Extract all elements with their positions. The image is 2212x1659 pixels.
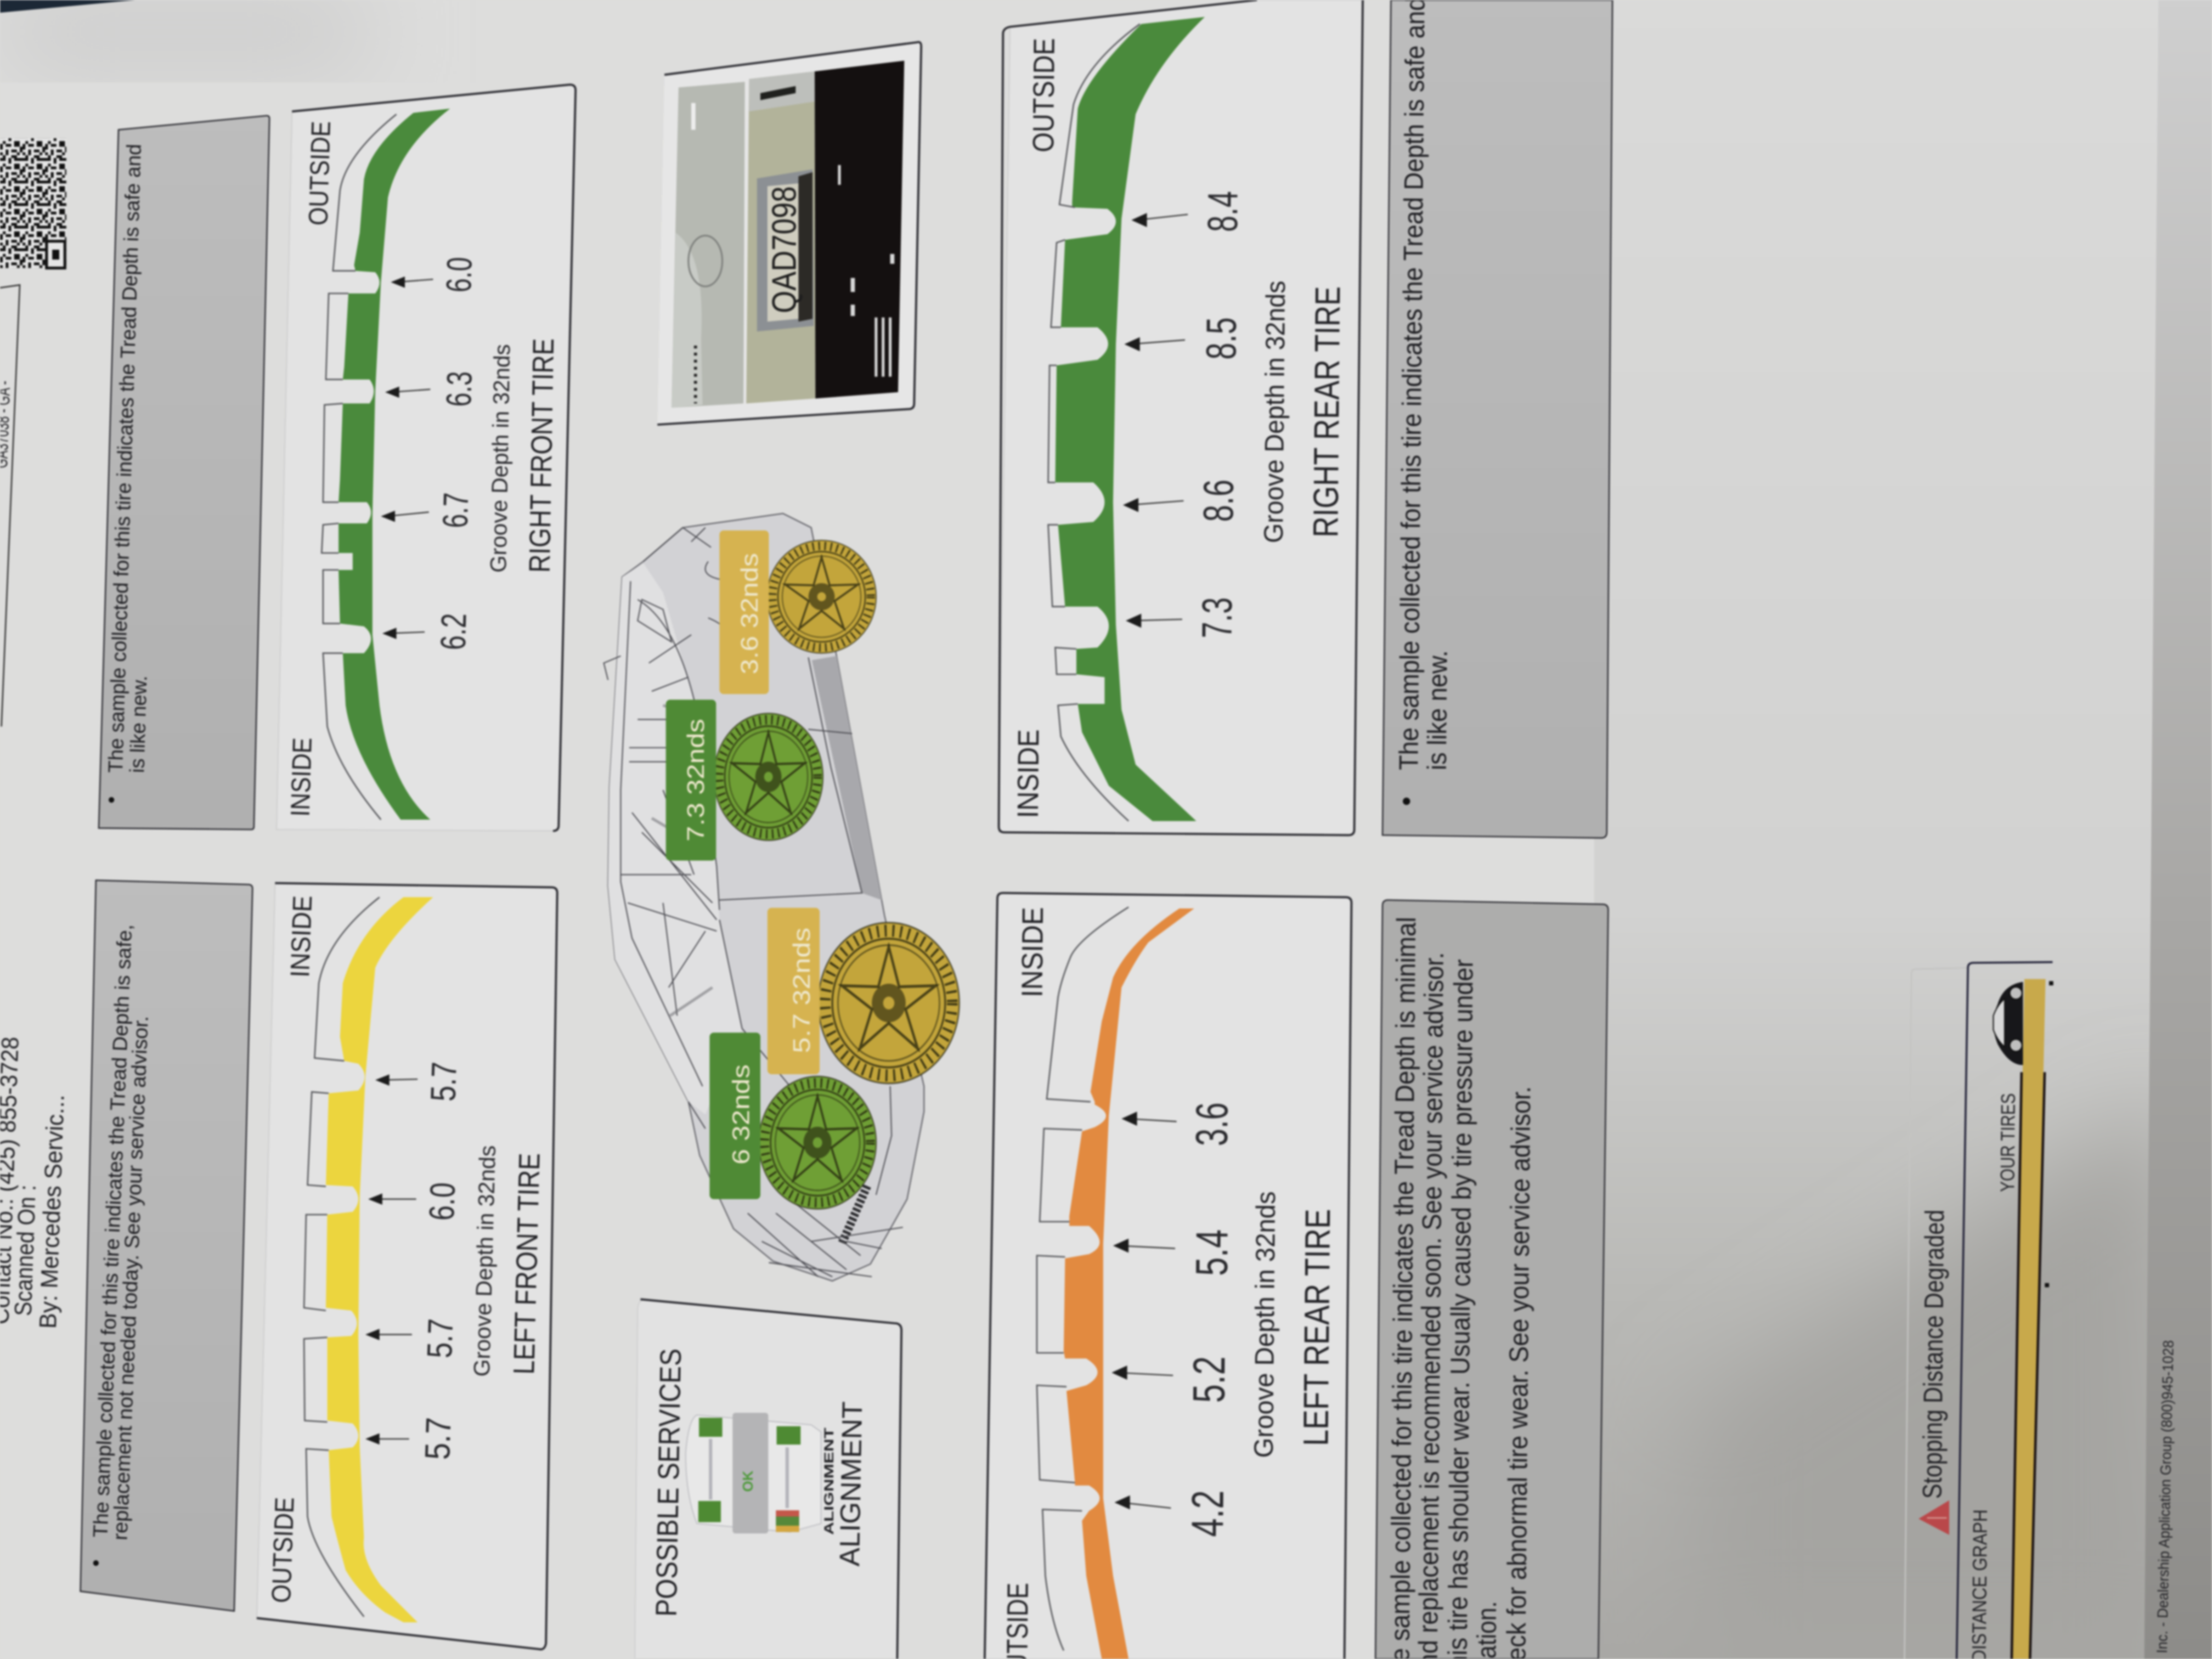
icon: QR code [0, 138, 66, 268]
badge: 5.7 32nds [768, 908, 820, 1074]
panel: possible services [635, 1299, 901, 1659]
groove arrows [1123, 213, 1188, 628]
illustration: car with tire readings [604, 514, 960, 1281]
panel: left front tire note [81, 881, 252, 1611]
groove depth values: 8.5 [1198, 317, 1245, 360]
heading: Stopping Distance Degraded [1918, 1210, 1950, 1499]
groove depth values: 5.7 [423, 1061, 464, 1102]
bar markers [2045, 981, 2053, 1287]
groove depth values: 6.7 [436, 492, 476, 528]
panel: license plate photo [657, 42, 921, 425]
panel: right front tire [276, 84, 575, 831]
groove depth values: 3.6 [1187, 1102, 1237, 1146]
panel: left rear tire note: and replacement is recommended soon. See your service advisor. [1413, 952, 1449, 1659]
tire labels: Groove Depth in 32nds [1249, 1191, 1281, 1458]
groove depth values: 7.3 [1194, 597, 1241, 639]
tire labels: Groove Depth in 32nds [469, 1145, 500, 1377]
tread profile: green [1055, 17, 1205, 821]
groove arrows [365, 1074, 417, 1444]
groove depth values: 5.4 [1187, 1229, 1238, 1276]
tire labels: Groove Depth in 32nds [486, 344, 515, 573]
badge: 3.6 32nds: 3.6 32nds [736, 553, 763, 674]
tire labels: RIGHT FRONT TIRE [523, 338, 560, 573]
tread profile: yellow [326, 897, 433, 1622]
label: alignment large: ALIGNMENT [833, 1401, 868, 1567]
gold stopping bar [2012, 979, 2046, 1659]
tire labels: LEFT FRONT TIRE [507, 1153, 546, 1375]
groove depth values: 5.7 [417, 1417, 459, 1460]
warning triangle icon [1918, 1500, 1949, 1535]
tread profile: orange [1064, 909, 1194, 1659]
wheel: left front [759, 1076, 876, 1209]
panel: right rear tire note [1383, 0, 1612, 838]
panel: right front tire note: The sample collected for this tire indicates the Tread Depth is safe and [104, 144, 145, 773]
groove depth values: 6.2 [433, 613, 474, 651]
groove depth values [1183, 1102, 1238, 1537]
tire labels: LEFT REAR TIRE [1296, 1209, 1338, 1446]
graph frame [1957, 962, 2052, 1659]
panel: left rear tire [985, 893, 1351, 1659]
label: alignment small: ALIGNMENT [822, 1427, 837, 1535]
tire labels: OUTSIDE [1027, 38, 1061, 153]
photo: dark background [815, 61, 904, 398]
groove depth values [417, 1061, 464, 1460]
groove depth values: 6.3 [439, 371, 479, 407]
panel: left front tire note: replacement not needed today. See your service advisor. [108, 1015, 153, 1541]
groove depth values: 5.2 [1184, 1356, 1234, 1403]
icon: car [1993, 982, 2023, 1065]
badge: 7.3 32nds: 7.3 32nds [682, 719, 709, 842]
header text block [0, 285, 70, 1329]
panel: left front tire note: The sample collected for this tire indicates the Tread Depth is safe, [88, 924, 136, 1538]
wheel: left rear [818, 923, 960, 1084]
panel: left front tire [257, 883, 557, 1649]
groove arrows [1111, 1111, 1177, 1509]
groove depth values: 6.0 [439, 257, 479, 293]
groove depth values [1194, 191, 1246, 639]
badge: 6 32nds [709, 1032, 760, 1199]
wheel: right rear [767, 540, 876, 653]
groove depth values: 8.6 [1195, 479, 1243, 522]
panel: right rear tire [999, 0, 1363, 835]
badge: 7.3 32nds [666, 699, 716, 861]
label: your tires: YOUR TIRES [1996, 1093, 2019, 1192]
photo: license plate: QAD7098 [765, 186, 803, 313]
new tire outline [1048, 24, 1140, 821]
tire labels: OUTSIDE [303, 121, 336, 226]
groove depth values: 6.0 [422, 1182, 462, 1221]
panel: right rear tire note: is like new. [1423, 650, 1453, 770]
icon: alignment car [686, 1413, 821, 1533]
tire labels [1001, 907, 1338, 1659]
groove depth values: 5.7 [420, 1318, 460, 1359]
tire labels [267, 895, 546, 1604]
header text block: Scanned On : [10, 1184, 41, 1316]
tire labels: INSIDE [286, 737, 318, 817]
panel: left rear tire note [1375, 900, 1608, 1659]
panel: right front tire note [99, 116, 269, 830]
new tire outline [304, 897, 380, 1617]
heading: POSSIBLE SERVICES [650, 1348, 687, 1617]
photo: left wall [672, 82, 745, 408]
badge: 5.7 32nds: 5.7 32nds [788, 928, 815, 1053]
groove arrows [381, 276, 433, 639]
tire labels: INSIDE [1012, 729, 1045, 819]
panel: stopping distance [1904, 962, 2053, 1659]
bar edges [2012, 1072, 2045, 1659]
groove depth values: 8.4 [1199, 191, 1246, 232]
wheel: right front [714, 713, 823, 840]
footer text: Inc. - Dealership Application Group (800)945-1028 [2154, 1340, 2177, 1654]
tread profile: green [338, 109, 450, 820]
panel: right front tire note: is like new. [125, 675, 151, 773]
photo: license plate [757, 170, 814, 331]
header text block: By: Mercedes Servic... [35, 1094, 70, 1329]
car body [604, 514, 924, 1281]
groove depth values: 4.2 [1183, 1490, 1233, 1537]
tire labels: RIGHT REAR TIRE [1306, 286, 1347, 538]
icon: alignment car: OK [741, 1470, 756, 1492]
photo: vehicle rear [746, 71, 815, 403]
tire labels: Groove Depth in 32nds [1259, 280, 1291, 543]
badge: 6 32nds: 6 32nds [727, 1064, 754, 1165]
tire labels: INSIDE [285, 895, 318, 978]
new tire outline [1037, 907, 1128, 1651]
new tire outline [321, 114, 397, 820]
tire labels [1012, 38, 1347, 819]
tire labels: OUTSIDE [267, 1497, 300, 1604]
groove depth values [433, 257, 479, 651]
badge: 3.6 32nds [719, 531, 769, 694]
tire labels [286, 121, 560, 817]
tire labels: INSIDE [1016, 907, 1049, 997]
